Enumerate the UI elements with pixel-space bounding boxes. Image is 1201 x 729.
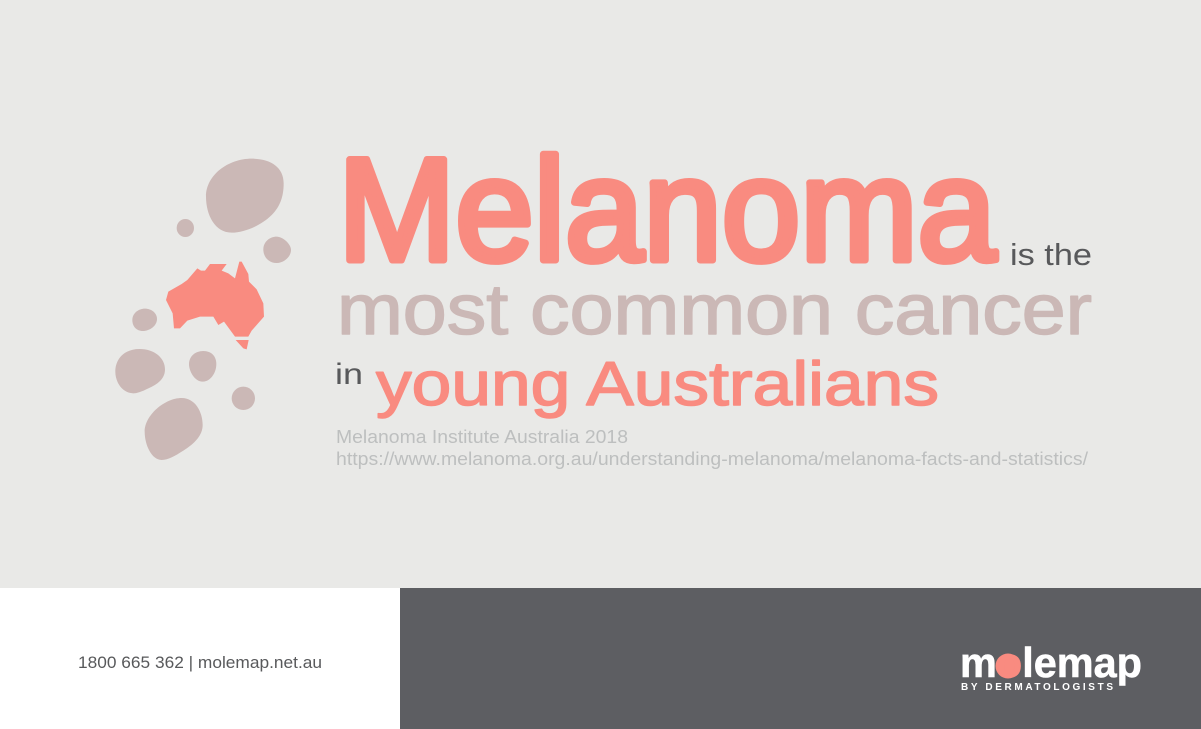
panel: contact footer: [0, 588, 400, 729]
icon: Australia: [166, 262, 264, 349]
contact details: 1800 665 362 | molemap.net.au: [78, 653, 322, 672]
panel: logo footer: [400, 588, 1201, 729]
text: is the: is the: [1010, 237, 1092, 272]
logo: molemap: BY DERMATOLOGISTS: [961, 682, 1113, 693]
heading: young Australians: young Australians: [376, 350, 939, 419]
text: in: in: [335, 358, 363, 391]
source citation: Melanoma Institute Australia 2018: [336, 427, 628, 447]
source citation: https://www.melanoma.org.au/understanding-melanoma/melanoma-facts-and-statistics/: [336, 449, 1088, 469]
icon: Australia map surrounded by mole shapes: [115, 159, 291, 460]
heading: most common cancer: most common cancer: [337, 271, 1092, 350]
logo: molemap: molemap: [960, 639, 1142, 686]
mole shapes: [115, 159, 291, 460]
source citation: [336, 427, 1088, 469]
heading: Melanoma: Melanoma: [338, 128, 997, 291]
